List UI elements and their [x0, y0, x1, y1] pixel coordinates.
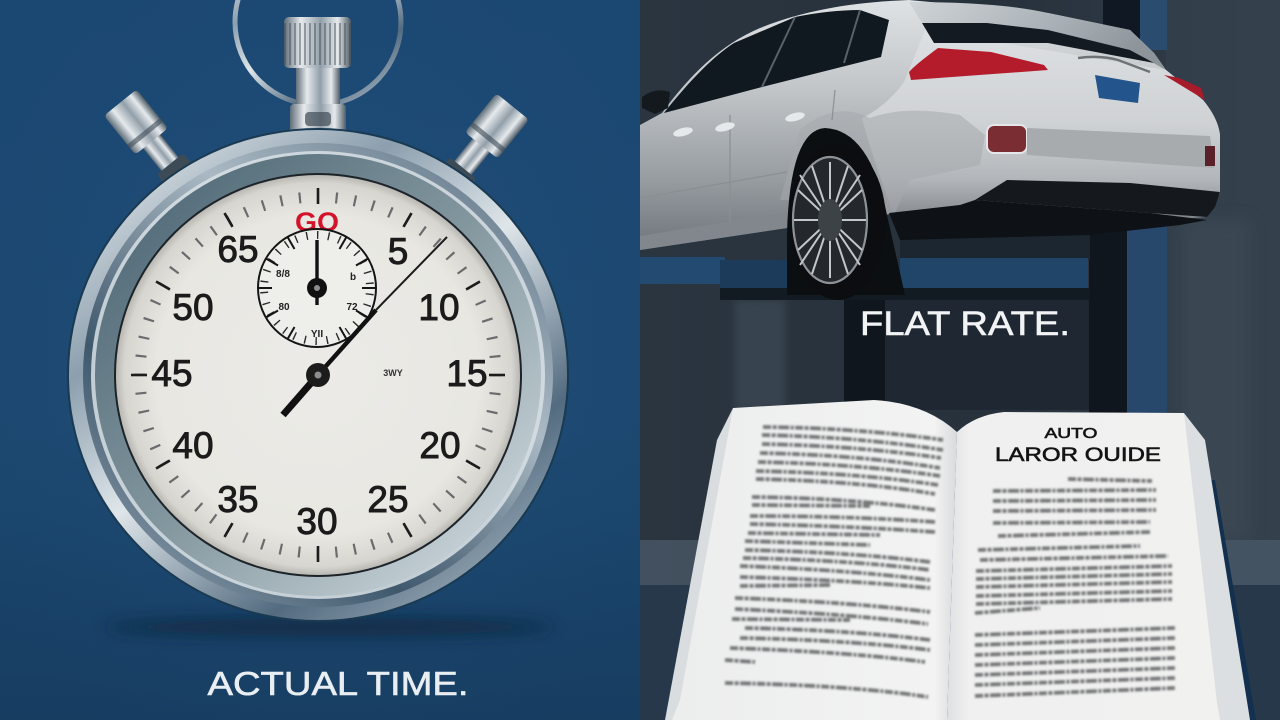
minute ticks: [140, 197, 496, 553]
left page stack: [665, 408, 733, 720]
left page text lines: [725, 427, 943, 697]
open book: [665, 400, 1256, 720]
dial numbers: 10: [418, 287, 460, 328]
rear reflector: [987, 125, 1027, 153]
dial numbers: [151, 229, 488, 542]
dial numbers: 30: [296, 501, 338, 542]
lift posts: [844, 0, 1167, 415]
car rear panel: [862, 30, 1220, 217]
left pusher: [104, 89, 203, 197]
major ticks: [131, 188, 505, 562]
left tail light: [909, 48, 1048, 80]
stopwatch top ring: [235, 0, 401, 105]
car lower door sill: [640, 212, 787, 250]
right pusher: [430, 93, 529, 201]
right page stack: [1184, 413, 1250, 720]
dial numbers: 45: [151, 353, 193, 394]
stopwatch hand: [283, 237, 447, 415]
right page: [947, 412, 1220, 720]
car windows: [664, 10, 889, 113]
license plate: [1095, 75, 1140, 103]
caption: actual time: ACTUAL TIME.: [208, 665, 468, 702]
stopwatch case: [67, 128, 569, 622]
sub dial: 8/8: [276, 269, 290, 280]
rear window: [922, 23, 1154, 63]
dial numbers: 5: [388, 231, 408, 272]
car: [640, 0, 1220, 300]
lift arm: [640, 235, 1090, 300]
panel: flat rate: [640, 0, 1280, 720]
book title: AUTO: [1044, 425, 1098, 442]
mirror: [642, 90, 670, 114]
red GO label: GO: [295, 207, 339, 237]
dial numbers: 25: [367, 479, 409, 520]
dial numbers: 15: [446, 353, 488, 394]
sub dial: 80: [278, 302, 290, 313]
door shut lines: [640, 90, 835, 222]
sub dial: [258, 229, 376, 347]
sub dial: b: [350, 272, 356, 283]
wheel arch: [787, 128, 905, 295]
dial numbers: 50: [172, 287, 214, 328]
window pillars: [762, 10, 860, 87]
dial numbers: 40: [172, 425, 214, 466]
dial numbers: 35: [217, 479, 259, 520]
book title: LAROR OUIDE: [995, 445, 1161, 466]
dial numbers: 65: [217, 229, 259, 270]
panel: actual time: [0, 0, 640, 720]
left page: [672, 400, 957, 720]
diffuser: [975, 180, 1220, 217]
right page text lines: [975, 479, 1175, 696]
right tail light: [1164, 75, 1205, 100]
stopwatch crown: [284, 17, 351, 134]
fender shading: [780, 111, 985, 215]
book cover: [665, 470, 1256, 720]
dial numbers: 20: [419, 425, 461, 466]
book title: [995, 425, 1161, 466]
car body: [640, 0, 1220, 250]
bumper insert: [1027, 128, 1214, 168]
sub dial: 72: [346, 302, 358, 313]
icon: stopwatch: [67, 0, 569, 622]
trunk chrome: [1078, 57, 1150, 72]
sub dial: YII: [311, 329, 323, 340]
door handles: [714, 121, 736, 133]
stopwatch dial: [116, 175, 520, 575]
rear wheel: [790, 144, 886, 300]
caption: flat rate: FLAT RATE.: [860, 305, 1070, 343]
spoiler: [909, 2, 1166, 70]
small dial label: 3WY: [383, 368, 403, 378]
